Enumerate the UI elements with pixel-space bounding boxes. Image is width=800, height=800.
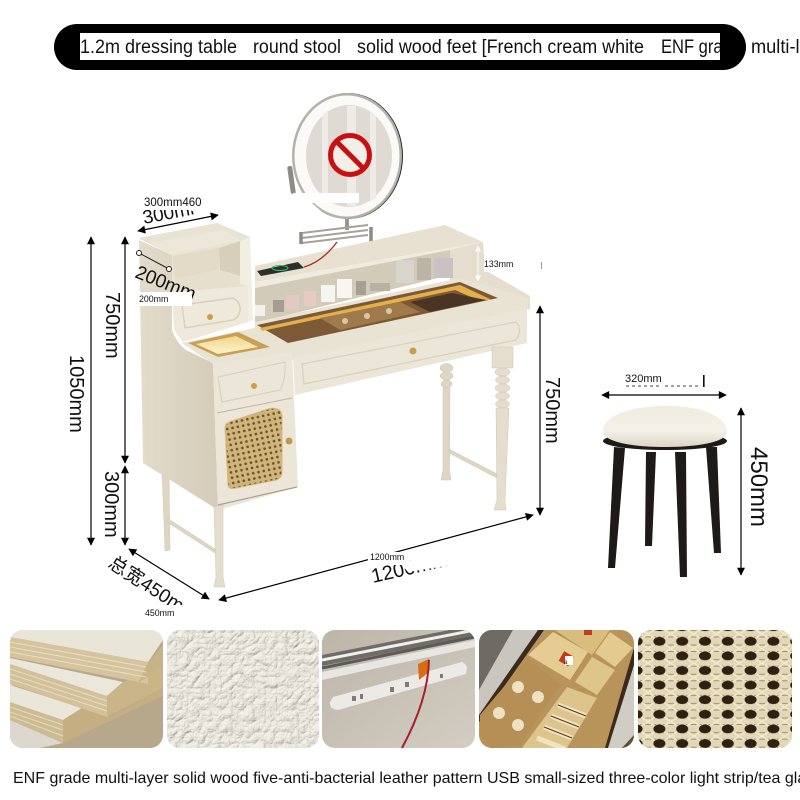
dimension: tower depth 200mm: 200mm: [132, 262, 199, 305]
dimension: stool width 320mm: [602, 373, 726, 395]
back legs and braces: [162, 364, 497, 553]
icon: red prohibition sign: [330, 136, 370, 174]
phone charging pad: [257, 242, 337, 276]
dimension: upper height 750mm: 750mm: [101, 292, 123, 359]
photo: multi-layer wood: [10, 630, 163, 748]
title banner: solid wood feet [French cream white: [357, 37, 644, 58]
top surface and glass drawer: [182, 278, 530, 364]
photo: USB strip: [322, 625, 475, 748]
dimension: left total height 1050mm: 1050mm: [65, 355, 87, 433]
left tower: [138, 223, 253, 342]
left glowing box: [188, 332, 270, 357]
dimension: tower depth 200mm: 200mm: [139, 294, 168, 304]
front legs: [214, 347, 513, 587]
title banner: [54, 24, 800, 70]
dimension: hutch height 133mm: 133mm: [484, 259, 513, 269]
dimension: right height 750mm: 750mm: [541, 377, 563, 444]
dimension: depth 450mm: 总宽450mm: [104, 552, 201, 625]
left cabinet front with cane door: [213, 352, 298, 510]
photo: drawer compartments: a: [564, 660, 568, 666]
photo: rattan cane weave: [638, 630, 792, 748]
desk side panel: [139, 240, 218, 510]
dimension: width 1200mm: [219, 515, 533, 600]
title banner: 1.2m dressing table: [80, 37, 237, 58]
dimension: width 1200mm: 1200mm: [370, 552, 404, 562]
upper hutch shelf: [255, 225, 530, 323]
desk illustration: [138, 223, 530, 587]
title banner: round stool: [253, 37, 341, 58]
photo: leather texture: [167, 630, 319, 748]
dimension: stool width 320mm: 320mm: [625, 373, 662, 385]
photo: drawer compartments: [479, 630, 634, 749]
dimension: top width 300mm: 300mm: [141, 196, 207, 229]
dimension: stool height 450mm: 450mm: [745, 447, 772, 527]
dimension: width 1200mm: 1200mm: [369, 549, 450, 588]
icon: round LED mirror: [287, 93, 403, 244]
dimension: depth 450mm: 450mm: [145, 608, 174, 618]
title banner: ENF grade: [661, 37, 741, 58]
cosmetics on shelf: [255, 258, 453, 316]
dimension: hutch height 133mm: [478, 246, 542, 281]
main drawer front: [293, 308, 527, 395]
stool: [603, 406, 727, 577]
bottom caption: ENF grade multi-layer solid wood five-anti-bacterial leather pattern USB small-sized three-color light strip/tea glass: [13, 770, 800, 787]
dimension: top width 300mm: 300mm460: [144, 197, 202, 209]
dimension: lower height 300mm: 300mm: [100, 471, 122, 538]
